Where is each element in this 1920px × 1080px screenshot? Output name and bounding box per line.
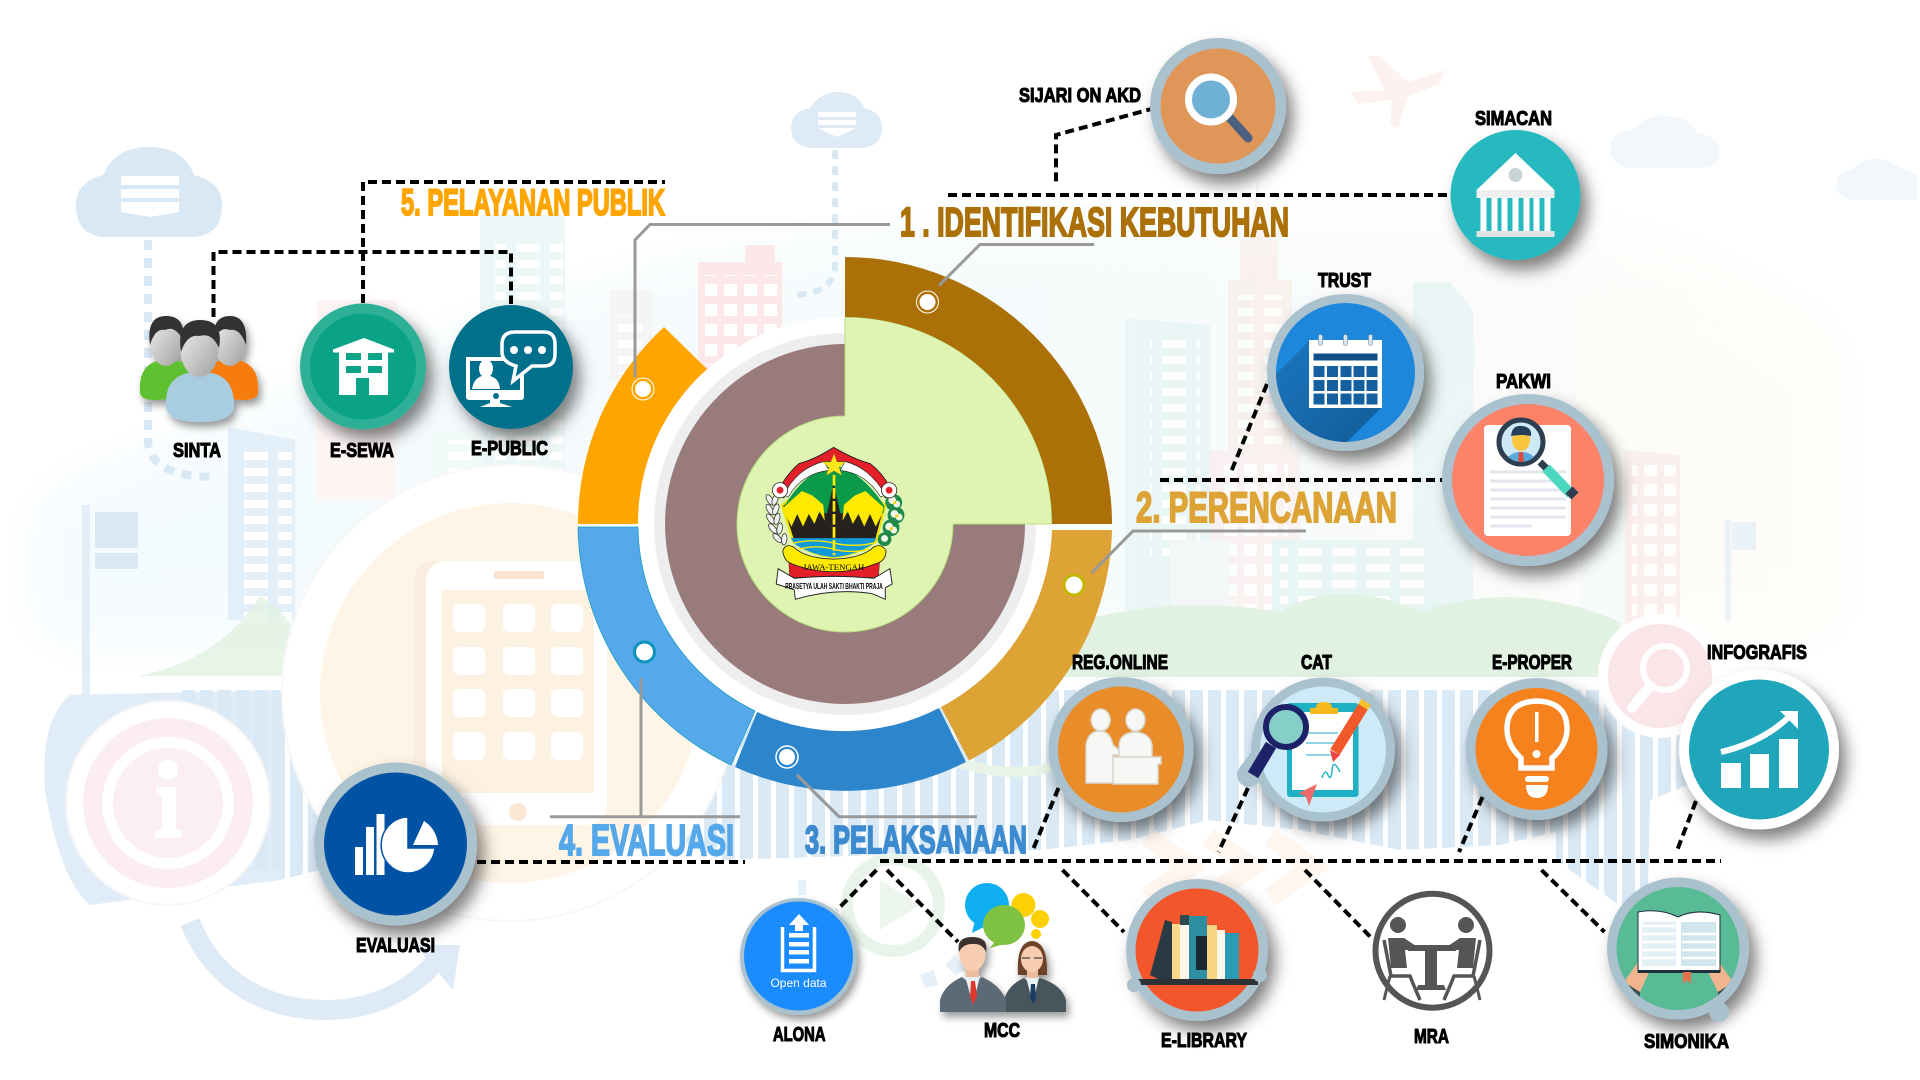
label: SIMACAN: SIMACAN <box>1475 107 1552 130</box>
segment 1 identifikasi <box>845 257 1112 524</box>
crest of Jawa Tengah <box>765 447 904 599</box>
heading: stage 4: 4. EVALUASI <box>559 816 734 865</box>
background: play circle <box>798 859 965 988</box>
heading: stage 1: 1 . IDENTIFIKASI KEBUTUHAN <box>900 199 1289 245</box>
background: clouds <box>76 92 882 237</box>
crest: motto ribbon: PRASETYA ULAH SAKTI BHAKTI PRAJA <box>785 582 883 591</box>
icon: REG.ONLINE <box>1048 677 1194 822</box>
crest: cotton <box>878 494 904 546</box>
crest: wheat <box>765 493 787 545</box>
crest: star <box>823 454 845 475</box>
donut chart: five process stages <box>578 257 1112 791</box>
two figures <box>940 937 1066 1012</box>
background: information circle <box>66 701 270 905</box>
heading: stage 3: 3. PELAKSANAAN <box>805 819 1027 862</box>
label: TRUST: TRUST <box>1318 269 1371 292</box>
background: arrow arc <box>190 922 460 1010</box>
icon: E-SEWA <box>300 304 426 430</box>
label: E-LIBRARY: E-LIBRARY <box>1161 1029 1247 1052</box>
icon: MRA meeting <box>1376 894 1490 1008</box>
icon: SINTA people group <box>140 316 258 422</box>
segment 5 pelayanan publik <box>578 327 707 524</box>
icon: SIMACAN <box>1450 130 1580 260</box>
icon: ALONA open data <box>740 898 857 1015</box>
icon: TRUST calendar <box>1238 294 1424 478</box>
label: EVALUASI: EVALUASI <box>356 934 435 957</box>
segment 4 evaluasi <box>578 527 755 765</box>
dashed connector lines <box>214 108 1721 942</box>
icon: CAT clipboard and magnifier <box>1249 678 1395 822</box>
crest: red top scrollwork <box>776 447 893 498</box>
donut hub ring <box>638 317 1052 731</box>
heading: stage 2: 2. PERENCANAAN <box>1136 484 1397 532</box>
label: REG.ONLINE: REG.ONLINE <box>1072 651 1168 674</box>
background: right buildings <box>1125 179 1680 640</box>
label: MCC: MCC <box>984 1019 1020 1042</box>
background: phone in circle <box>282 465 738 921</box>
centre light green shape <box>737 317 1052 632</box>
crest: name band: JAWA-TENGAH <box>803 563 864 572</box>
label: E-SEWA: E-SEWA <box>330 439 394 462</box>
speech bubbles <box>965 883 1049 948</box>
background: vertical stripe band <box>180 690 1700 925</box>
background: left and centre buildings <box>82 215 1756 695</box>
icon: E-PROPER light bulb <box>1466 678 1608 820</box>
label: E-PUBLIC: E-PUBLIC <box>471 437 548 460</box>
books <box>1150 915 1239 979</box>
icon: INFOGRAFIS growth chart <box>1679 670 1839 830</box>
label: SIJARI ON AKD: SIJARI ON AKD <box>1019 84 1141 107</box>
crest: shield <box>782 463 885 557</box>
segment 2 perencanaan <box>941 530 1112 760</box>
icon: EVALUASI charts <box>314 762 477 926</box>
label: SINTA: SINTA <box>173 439 221 462</box>
label: CAT: CAT <box>1301 651 1332 674</box>
background: magnifier circle <box>1598 614 1722 738</box>
icon: E-PUBLIC <box>449 305 573 429</box>
icon: PAKWI document search <box>1442 394 1614 566</box>
icon: SIMONIKA reader <box>1607 878 1749 1022</box>
label: MRA: MRA <box>1414 1025 1449 1048</box>
background: green hills <box>138 594 1620 677</box>
icon: SIJARI ON AKD <box>1150 38 1286 174</box>
label: SIMONIKA: SIMONIKA <box>1644 1030 1729 1053</box>
leader lines from donut to stage headings <box>550 224 1306 817</box>
label: INFOGRAFIS: INFOGRAFIS <box>1707 641 1807 664</box>
icon: MCC people with speech bubbles <box>940 883 1066 1012</box>
icon: E-LIBRARY bookshelf <box>1126 879 1268 1021</box>
heading: stage 5: 5. PELAYANAN PUBLIK <box>401 182 665 223</box>
icon: ALONA open data: Open data <box>770 976 827 990</box>
crest: motto ribbon <box>776 569 892 599</box>
background: chevrons <box>1147 837 1313 897</box>
crest: name band <box>783 546 886 577</box>
label: PAKWI: PAKWI <box>1496 370 1551 393</box>
label: ALONA: ALONA <box>773 1023 826 1046</box>
segment 3 pelaksanaan <box>735 708 966 791</box>
marker dots <box>632 291 1084 768</box>
label: E-PROPER: E-PROPER <box>1492 651 1572 674</box>
background: airplane <box>1350 56 1445 128</box>
